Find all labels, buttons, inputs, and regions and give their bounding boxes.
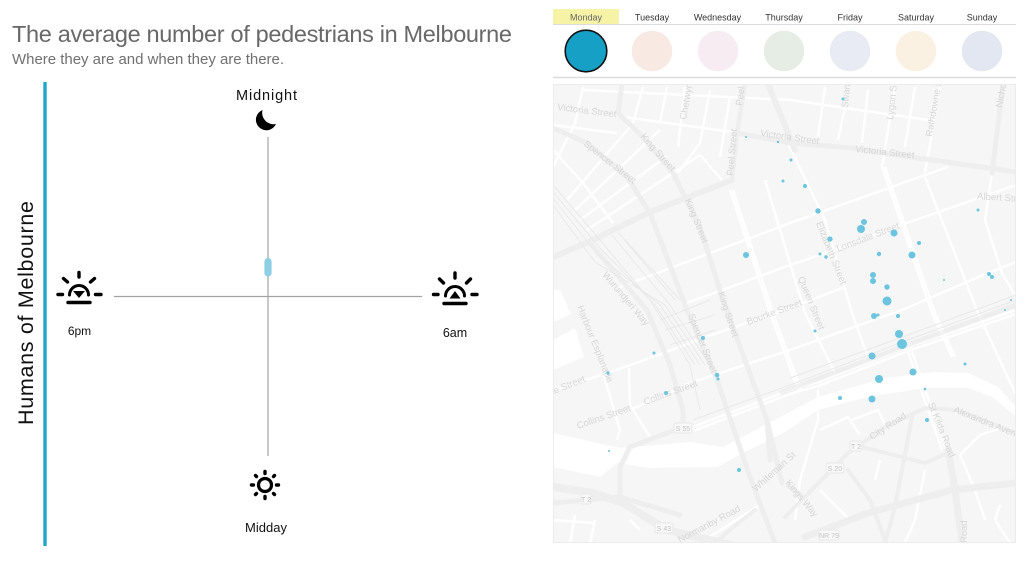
day labels: Tuesday — [635, 12, 670, 22]
title: The average number of pedestrians in Melbourne — [12, 21, 512, 47]
radial time chart — [58, 88, 477, 535]
river and open areas — [553, 290, 1016, 477]
day labels: Sunday — [967, 12, 998, 22]
day labels: Friday — [837, 12, 863, 22]
street labels: Normanby Road — [676, 503, 742, 546]
street labels: Road — [959, 520, 970, 543]
street labels: Chetwynd Street — [678, 49, 701, 121]
street labels: Queen Street — [795, 275, 827, 332]
street labels: Whiteman St — [751, 449, 799, 494]
highlight: selected day Monday — [553, 9, 619, 24]
street labels: Peel Street — [725, 128, 740, 176]
railway yards — [553, 185, 1016, 420]
street labels: King Street — [682, 197, 710, 245]
day circles — [565, 30, 1002, 72]
icon: sunset — [58, 272, 101, 302]
major roads — [553, 84, 1016, 546]
street labels: Harbour Esplanade — [574, 304, 615, 384]
day selector — [553, 9, 1016, 78]
road shields: T 2 — [581, 497, 591, 504]
road shields: T 2 — [851, 444, 861, 451]
street labels: Wurundjeri Way — [600, 270, 651, 328]
icon: sunrise — [434, 273, 477, 304]
street labels: Lygon Street — [885, 66, 902, 120]
street labels: Lonsdale Street — [835, 221, 902, 255]
street labels: Peel Street — [734, 58, 752, 106]
street labels: Nicholson — [994, 66, 1012, 109]
subtitle: Where they are and when they are there. — [12, 51, 284, 68]
street labels: Collins Street — [642, 378, 699, 408]
icon: moon — [256, 110, 276, 130]
map base — [553, 84, 1016, 543]
label: Midday: Midday — [245, 520, 288, 535]
street labels — [554, 85, 1015, 542]
street labels: Collins Street — [575, 403, 633, 432]
street labels: King Street — [638, 132, 678, 174]
road shields: S 20 — [828, 466, 842, 473]
axis lines — [114, 137, 422, 456]
day labels — [570, 12, 998, 22]
vertical heading: Humans of Melbourne: Humans of Melbourne — [14, 201, 38, 425]
label: Midnight: Midnight — [236, 88, 297, 104]
street labels: Victoria Street — [855, 144, 915, 161]
road shields: NR 79 — [819, 533, 839, 540]
street labels: St Kilda Road — [925, 401, 957, 459]
data mark: Monday capsule — [264, 258, 272, 276]
label: 6am: 6am — [443, 326, 467, 340]
road shields: S 55 — [676, 426, 690, 433]
street labels: Elizabeth Street — [813, 220, 849, 287]
day labels: Monday — [570, 12, 603, 22]
map panel — [553, 84, 1016, 543]
label: 6pm: 6pm — [68, 324, 91, 338]
street labels: Swanston — [840, 66, 855, 108]
street labels: Bourke Street — [529, 374, 587, 406]
day labels: Thursday — [765, 12, 803, 22]
street labels: Victoria Street — [760, 128, 820, 147]
day labels: Wednesday — [694, 12, 742, 22]
road shields — [581, 423, 862, 540]
street labels: Bourke Street — [745, 297, 804, 328]
divider lines — [553, 24, 1016, 78]
minor streets — [553, 87, 1016, 543]
street labels: Spencer Street — [581, 139, 638, 187]
road shields: S 43 — [657, 526, 671, 533]
street labels: Rathdowne Street — [924, 60, 948, 138]
pedestrian count dots — [606, 98, 1012, 472]
street labels: King Street — [715, 291, 740, 339]
icon: sun — [252, 472, 278, 498]
street labels: Spencer Street — [685, 312, 719, 375]
map border — [554, 84, 1016, 542]
street labels: Kings Way — [783, 478, 820, 520]
street labels: Victoria Street — [557, 102, 617, 120]
street labels: City Road — [868, 411, 909, 443]
blue divider bar — [43, 82, 47, 546]
day labels: Saturday — [898, 12, 935, 22]
